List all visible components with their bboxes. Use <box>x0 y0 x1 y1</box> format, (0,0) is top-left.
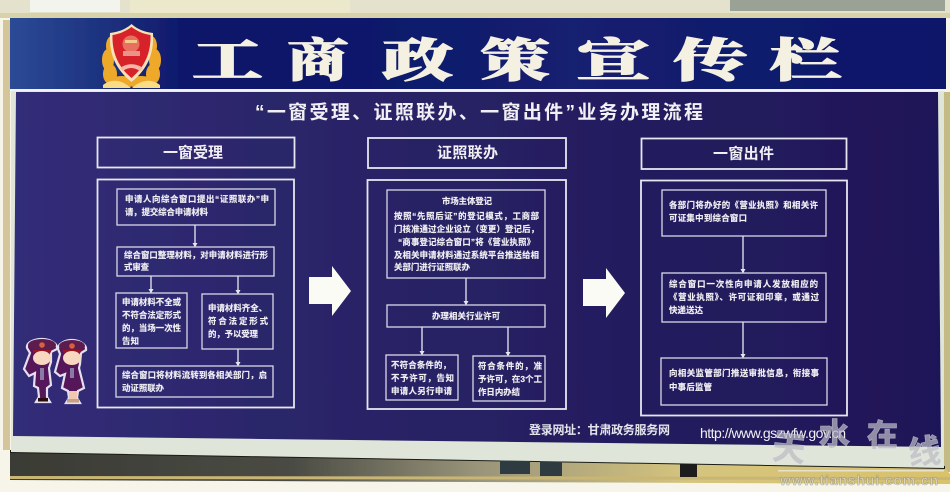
banner title: 商 <box>287 36 349 86</box>
step: incomplete materials: 告知 <box>122 336 139 346</box>
heading: 一窗出件 <box>642 138 846 169</box>
step: eligible: 作日内办结 <box>478 387 520 397</box>
header banner <box>10 18 946 89</box>
step: issue licences: 综合窗口一次性向申请人发放相应的 <box>669 279 818 289</box>
step: market entity registration: 按照“先照后证”的登记模式，工商部 <box>394 211 540 221</box>
step: collect licences <box>662 190 826 236</box>
title: “一窗受理、证照联办、一窗出件”业务办理流程 <box>255 100 703 124</box>
step: incomplete materials <box>116 293 187 348</box>
banner title: 策 <box>480 36 550 86</box>
step: formal review: 式审查 <box>124 262 150 272</box>
step: not eligible: 不予许可，告知 <box>391 373 454 383</box>
banner title: 传 <box>673 36 747 86</box>
step: issue licences: 快递送达 <box>669 305 704 315</box>
footer: url: http://www.gszwfw.gov.cn <box>700 425 846 441</box>
main purple panel <box>13 92 941 447</box>
step: eligible: 予许可，在3个工 <box>478 374 543 384</box>
step: not eligible: 不符合条件的， <box>391 360 451 370</box>
officer: left <box>24 339 57 402</box>
step: transfer materials <box>116 366 273 397</box>
outer frame <box>641 180 847 416</box>
banner title: 政 <box>382 36 453 86</box>
outer frame <box>98 180 294 408</box>
arrow <box>506 327 510 356</box>
banner title <box>192 36 841 86</box>
heading: 一窗受理 <box>98 138 294 168</box>
step: formal review <box>117 247 274 276</box>
step: eligible <box>473 356 545 401</box>
arrow <box>236 349 240 366</box>
panel: 一窗受理 <box>98 138 294 408</box>
step: transfer materials: 动证照联办 <box>122 383 165 393</box>
step: not eligible <box>386 355 458 400</box>
watermark: 天 <box>770 429 808 471</box>
step: complete materials: 的，予以受理 <box>208 329 259 339</box>
arrow <box>740 236 746 274</box>
step: push to regulators: 向相关监管部门推送审批信息，衔接事 <box>669 368 820 378</box>
arrow <box>148 276 154 294</box>
step: incomplete materials: 的，当场一次性 <box>122 323 182 333</box>
watermark: 线 <box>906 432 943 472</box>
step: push to regulators <box>661 358 827 405</box>
panel: 证照联办 <box>368 138 566 409</box>
heading: 一窗出件: 一窗出件 <box>713 144 774 162</box>
step: issue licences <box>662 273 826 322</box>
white divider under banner <box>11 89 945 91</box>
arrow <box>464 278 468 306</box>
arrow <box>192 225 198 248</box>
bottom frame <box>10 450 950 484</box>
step: market entity registration: 门核准通过企业设立（变更）登记后， <box>394 224 539 234</box>
banner title: 工 <box>192 36 263 86</box>
arrow <box>420 327 424 356</box>
step: market entity registration: 关部门进行证照联办 <box>394 262 471 272</box>
step: formal review: 综合窗口整理材料，对申请材料进行形 <box>124 250 269 260</box>
step: submit application <box>117 189 275 225</box>
arrow: step two to step three <box>583 268 625 318</box>
step: market entity registration: 及相关申请材料通过系统平台推送给相 <box>394 250 539 260</box>
step: complete materials: 申请材料齐全、 <box>208 303 267 313</box>
step: market entity registration: “商事登记综合窗口”将《营业执照》 <box>398 237 535 247</box>
step: transfer materials: 综合窗口将材料流转到各相关部门，启 <box>122 370 267 380</box>
banner title: 宣 <box>576 36 650 86</box>
arrow: step one to step two <box>309 266 351 316</box>
watermark <box>770 418 944 488</box>
step: market entity registration: 市场主体登记 <box>442 196 493 206</box>
heading: 证照联办: 证照联办 <box>437 144 498 162</box>
step: submit application: 请，提交综合申请材料 <box>125 207 209 217</box>
outer frame <box>368 180 566 409</box>
icon: emblem <box>102 24 161 88</box>
step: complete materials <box>202 294 273 349</box>
step: incomplete materials: 不符合法定形式 <box>122 310 182 320</box>
footer: login site name: 登录网址：甘肃政务服务网 <box>529 422 670 437</box>
arrow <box>236 276 240 294</box>
heading: 一窗受理: 一窗受理 <box>163 144 223 162</box>
panel: 一窗出件 <box>641 138 847 416</box>
watermark: www.tianshui.com.cn <box>779 472 938 488</box>
step: collect licences: 可证集中到综合窗口 <box>669 213 747 223</box>
watermark: 在 <box>867 418 898 454</box>
step: eligible: 符合条件的，准 <box>478 361 543 371</box>
step: collect licences: 各部门将办好的《营业执照》和相关许 <box>669 200 819 210</box>
step: issue licences: 《营业执照》、许可证和印章，或通过 <box>669 292 820 302</box>
step: submit application: 申请人向综合窗口提出“证照联办”申 <box>125 194 269 204</box>
step: industry permits <box>387 305 545 327</box>
icon: saluting officers <box>24 339 86 403</box>
step: push to regulators: 中事后监管 <box>669 382 712 392</box>
watermark: 水 <box>819 418 850 452</box>
step: complete materials: 符合法定形式 <box>208 316 269 326</box>
banner title: 栏 <box>770 36 841 86</box>
step: not eligible: 申请人另行申请 <box>391 386 453 396</box>
board grey border <box>11 90 944 468</box>
heading: 证照联办 <box>368 138 566 168</box>
step: market entity registration <box>387 190 545 278</box>
officer: right <box>55 340 86 403</box>
step: incomplete materials: 申请材料不全或 <box>122 297 182 307</box>
arrow <box>740 322 746 358</box>
step: industry permits: 办理相关行业许可 <box>432 311 500 321</box>
